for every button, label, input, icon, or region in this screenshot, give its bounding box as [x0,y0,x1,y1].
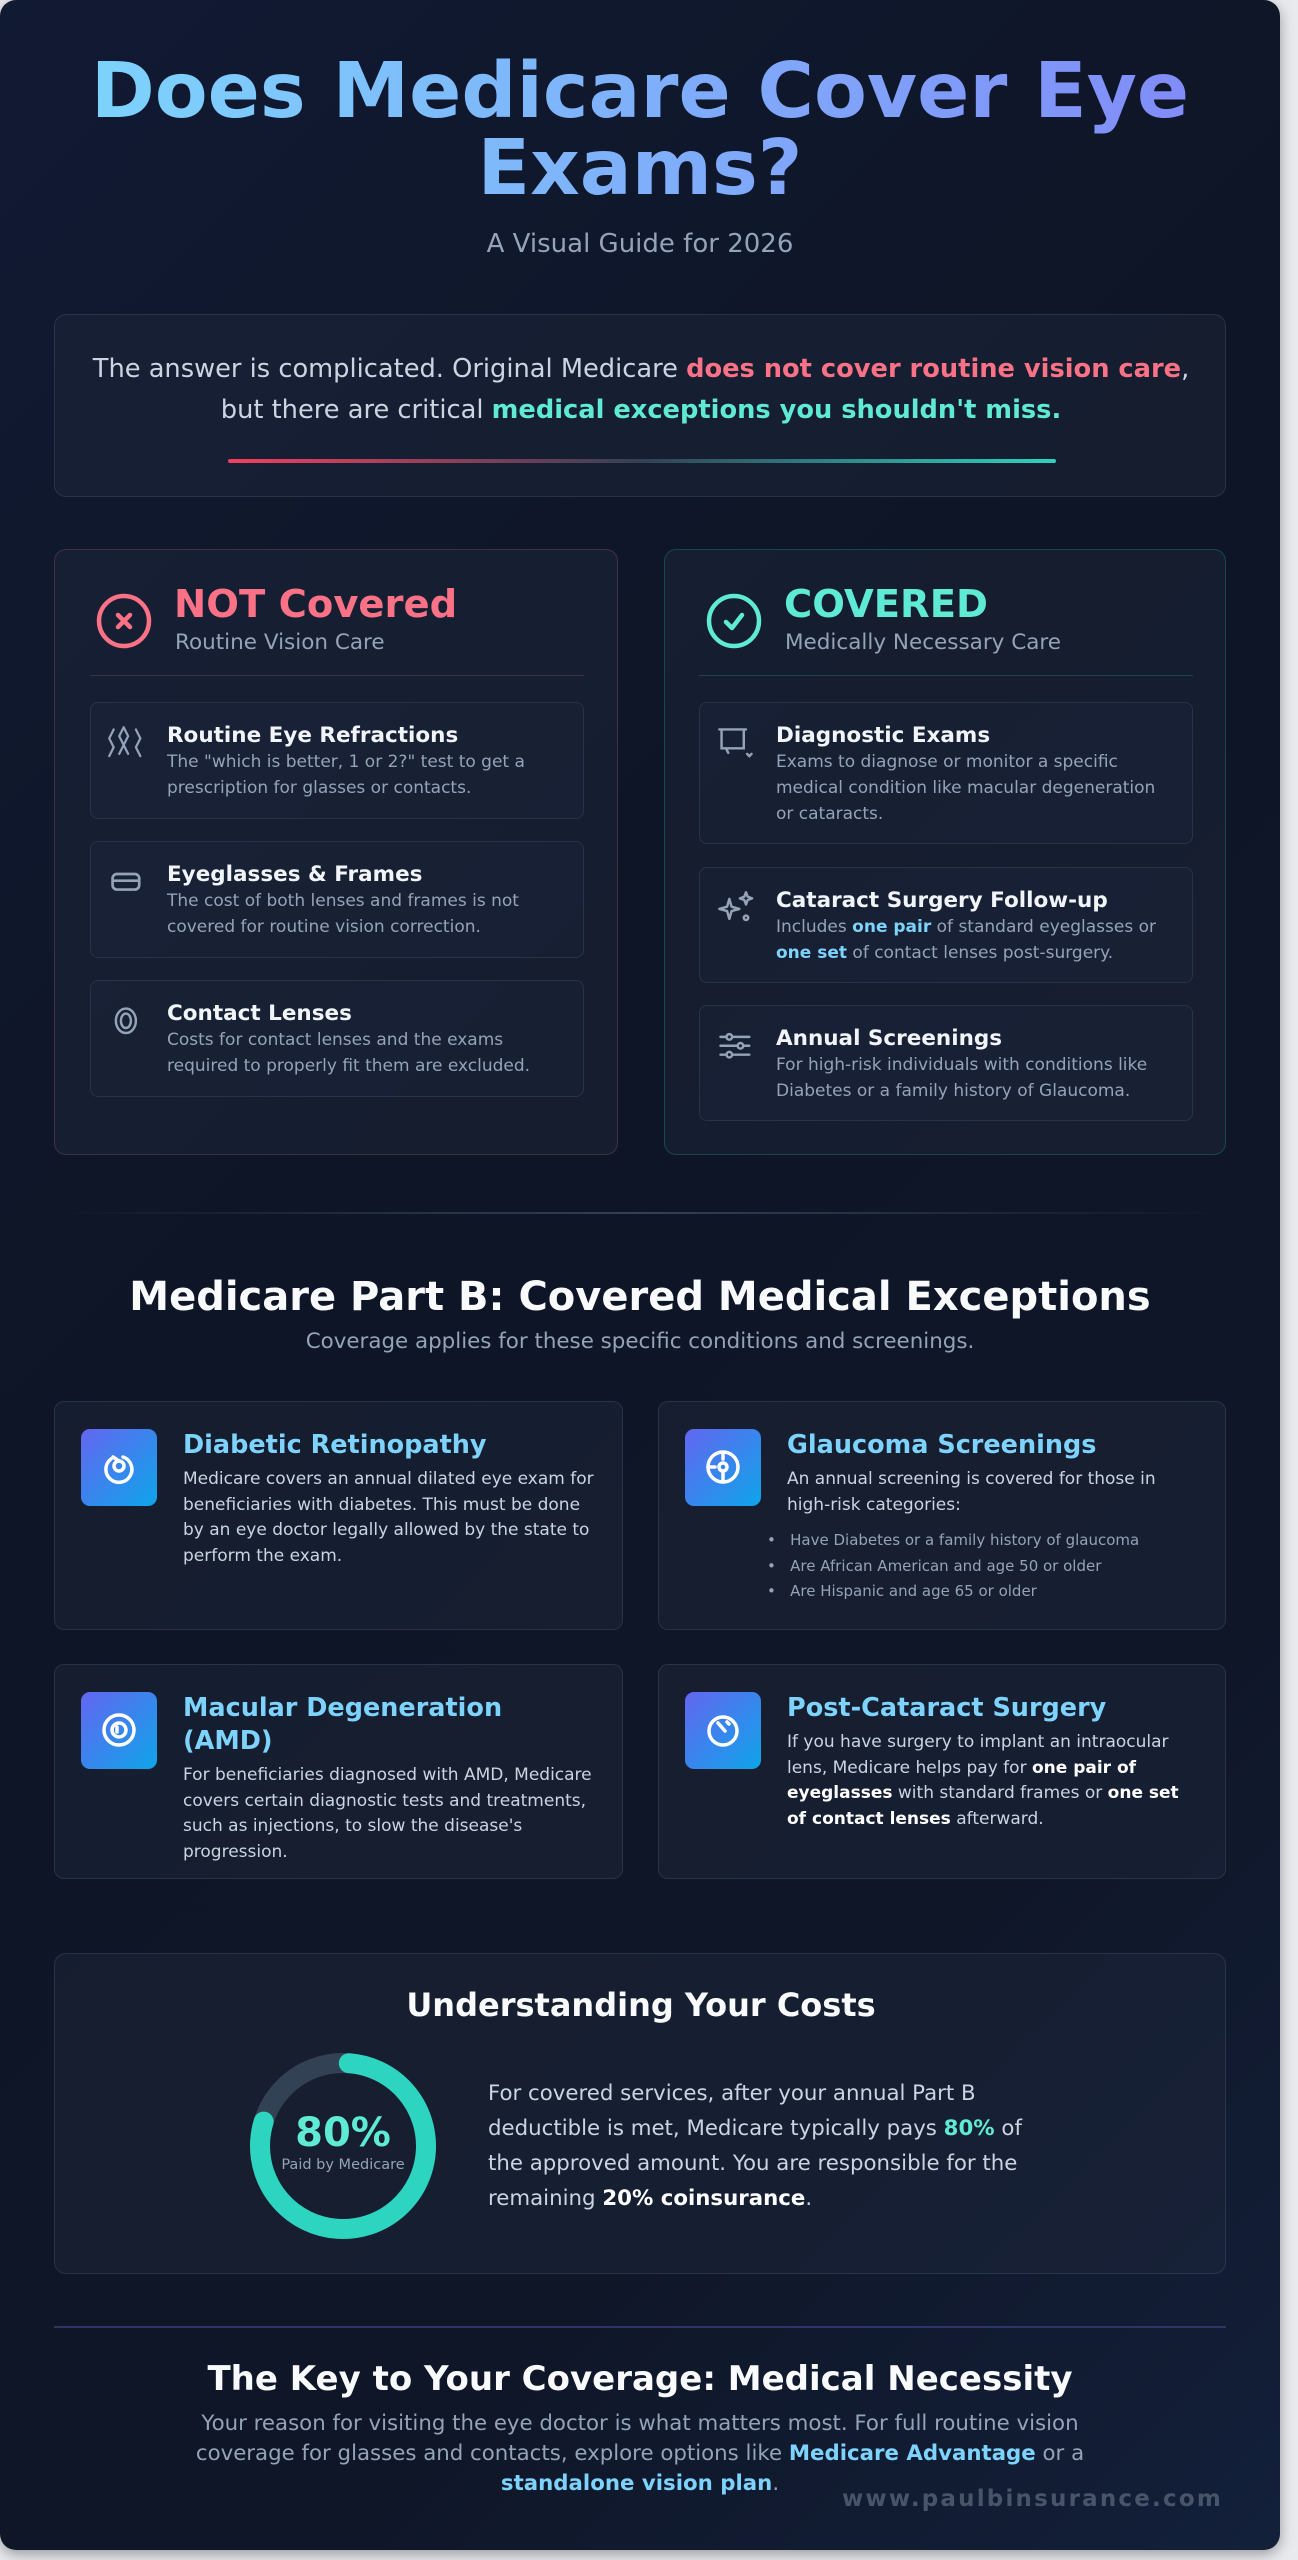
costs text: the approved amount. You are responsible for the [488,2151,1017,2176]
key text [196,2411,1084,2496]
subtitle: A Visual Guide for 2026 [487,229,793,259]
item: contacts: Contact Lenses [167,1001,352,1026]
bullet list [767,1531,1139,1600]
card: macular degeneration: For beneficiaries diagnosed with AMD, Medicare [183,1765,592,1785]
item: diagnostic [699,702,1193,844]
subheading: Routine Vision Care [175,630,385,655]
icon: monitor [718,728,753,758]
section subheading: Coverage applies for these specific conditions and screenings. [306,1329,974,1354]
item: refractions: prescription for glasses or contacts. [167,778,471,798]
intro panel [54,314,1226,497]
bullet list: • Are African American and age 50 or older [767,1557,1101,1575]
item: contacts: required to properly fit them are excluded. [167,1056,530,1076]
heading: NOT Covered [174,582,457,627]
key text: standalone vision plan. [501,2471,779,2496]
intro text: but there are critical medical exceptions you shouldn't miss. [221,395,1061,425]
card: diabetic retinopathy [54,1401,623,1630]
key text: coverage for glasses and contacts, explore options like Medicare Advantage or a [196,2441,1084,2466]
item: screenings: Annual Screenings [776,1026,1002,1051]
item: contacts [90,980,584,1097]
costs text: remaining 20% coinsurance. [488,2186,812,2211]
intro text [92,354,1189,425]
item: cataract: one set of contact lenses post-surgery. [776,943,1113,963]
item: refractions: Routine Eye Refractions [167,723,458,748]
card: diabetic retinopathy: perform the exam. [183,1546,342,1566]
panel: covered [664,549,1226,1155]
icon: sparkles [718,891,754,922]
item: diagnostic: Exams to diagnose or monitor a specific [776,752,1118,772]
card: glaucoma [658,1401,1226,1630]
item: diagnostic: or cataracts. [776,804,883,824]
item: refractions [90,702,584,819]
card: macular degeneration: such as injections, to slow the disease's [183,1816,522,1836]
key text: Your reason for visiting the eye doctor is what matters most. For full routine vision [201,2411,1079,2436]
item: cataract [699,867,1193,983]
card: glaucoma: high-risk categories: [787,1495,961,1515]
item: screenings [699,1005,1193,1121]
costs text: For covered services, after your annual Part B [488,2081,976,2106]
costs heading: Understanding Your Costs [406,1986,876,2024]
card: macular degeneration: (AMD) [183,1726,273,1756]
item: screenings: For high-risk individuals with conditions like [776,1055,1147,1075]
item: cataract: Includes one pair of standard eyeglasses or [776,917,1156,937]
card: diabetic retinopathy: Medicare covers an annual dilated eye exam for [183,1469,594,1489]
item: eyeglasses: Eyeglasses & Frames [167,862,422,887]
icon: check circle [706,594,762,648]
item: diagnostic: medical condition like macular degeneration [776,778,1155,798]
donut chart [250,2053,436,2239]
card: diabetic retinopathy: by an eye doctor legally allowed by the state to [183,1520,589,1540]
card: glaucoma: An annual screening is covered for those in [787,1469,1156,1489]
title [91,47,1189,213]
card: diabetic retinopathy: Diabetic Retinopathy [183,1430,487,1460]
panel: costs [54,1953,1226,2274]
card: glaucoma: Glaucoma Screenings [787,1430,1096,1460]
subheading: Medically Necessary Care [785,630,1061,655]
icon: target [685,1429,761,1506]
key heading: The Key to Your Coverage: Medical Necessity [207,2359,1073,2399]
costs text [488,2081,1022,2211]
section heading: Medicare Part B: Covered Medical Exceptions [129,1274,1151,1320]
card: post-cataract: If you have surgery to implant an intraocular [787,1732,1169,1752]
costs text: deductible is met, Medicare typically pays 80% of [488,2116,1022,2141]
title: Exams? [478,124,802,213]
card: post-cataract [658,1664,1226,1879]
item: eyeglasses: The cost of both lenses and frames is not [167,891,519,911]
card: post-cataract: Post-Cataract Surgery [787,1693,1106,1723]
donut label: Paid by Medicare [281,2157,405,2173]
donut value: 80% [295,2110,391,2156]
card: macular degeneration: Macular Degeneration [183,1693,502,1723]
item: cataract: Cataract Surgery Follow-up [776,888,1108,913]
gradient bar [228,459,1056,463]
card: post-cataract: lens, Medicare helps pay for one pair of [787,1758,1136,1778]
icon: case [111,872,141,891]
item: eyeglasses: covered for routine vision correction. [167,917,481,937]
icon: eye [81,1429,157,1506]
item: eyeglasses [90,841,584,958]
card: post-cataract: eyeglasses with standard frames or one set [787,1783,1179,1803]
heading: COVERED [784,582,988,627]
intro text: The answer is complicated. Original Medicare does not cover routine vision care, [93,354,1189,384]
title: Does Medicare Cover Eye [91,47,1189,136]
card: macular degeneration: covers certain diagnostic tests and treatments, [183,1791,586,1811]
watermark: www.paulbinsurance.com [842,2486,1223,2512]
icon: sliders [719,1032,750,1059]
icon: x circle [96,594,152,648]
card: macular degeneration [54,1664,623,1879]
icon: gauge [685,1692,761,1769]
card: macular degeneration: progression. [183,1842,288,1862]
icon: lens [114,1007,138,1034]
item: contacts: Costs for contact lenses and the exams [167,1030,503,1050]
item: refractions: The "which is better, 1 or 2?" test to get a [167,752,525,772]
item: screenings: Diabetes or a family history of Glaucoma. [776,1081,1130,1101]
panel: not covered [54,549,618,1155]
icon: waves [108,726,142,758]
bullet list: • Have Diabetes or a family history of glaucoma [767,1531,1139,1549]
icon: target eye [81,1692,157,1769]
bullet list: • Are Hispanic and age 65 or older [767,1582,1037,1600]
card: post-cataract: of contact lenses afterward. [787,1809,1044,1829]
card: diabetic retinopathy: beneficiaries with diabetes. This must be done [183,1495,580,1515]
item: diagnostic: Diagnostic Exams [776,723,990,748]
